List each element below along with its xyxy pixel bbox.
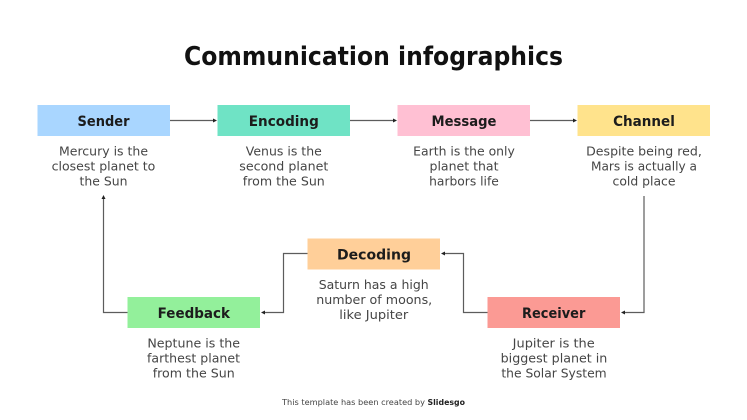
channel box: [578, 105, 710, 136]
decoding description: like Jupiter: [339, 308, 409, 323]
sender description: the Sun: [80, 175, 128, 190]
sender description: closest planet to: [52, 160, 156, 175]
channel description: Mars is actually a: [591, 160, 697, 175]
encoding heading: Encoding: [249, 114, 319, 130]
arrow: decoding to feedback: [261, 254, 308, 314]
message description: planet that: [430, 160, 498, 175]
arrow: channel to receiver: [621, 196, 644, 314]
panel: channel: [578, 105, 710, 190]
arrow: feedback to sender: [102, 195, 128, 312]
receiver box: [488, 297, 620, 328]
sender description: Mercury is the: [59, 145, 148, 160]
message description: harbors life: [429, 175, 499, 190]
receiver description: the Solar System: [501, 366, 607, 381]
receiver heading: Receiver: [522, 306, 586, 322]
decoding heading: Decoding: [337, 248, 411, 264]
message heading: Message: [432, 114, 497, 130]
title: Communication infographics: [184, 42, 563, 72]
receiver description: Jupiter is the: [512, 336, 595, 351]
feedback description: farthest planet: [147, 351, 240, 366]
decoding box: [308, 238, 440, 270]
panel: encoding: [218, 105, 350, 190]
arrow: encoding to message: [350, 118, 397, 122]
channel description: [586, 145, 702, 190]
encoding description: second planet: [239, 160, 328, 175]
message description: [413, 145, 515, 190]
feedback description: [147, 336, 240, 381]
message description: Earth is the only: [413, 145, 515, 160]
decoding description: [316, 278, 432, 323]
channel heading: Channel: [613, 114, 675, 130]
feedback description: Neptune is the: [147, 336, 240, 351]
encoding box: [218, 105, 350, 136]
sender description: [52, 145, 156, 190]
feedback box: [128, 297, 260, 328]
message box: [398, 105, 530, 136]
arrow: message to channel: [530, 118, 577, 122]
decoding description: Saturn has a high: [319, 278, 429, 293]
sender box: [38, 105, 170, 136]
arrow: sender to encoding: [170, 118, 217, 122]
sender heading: Sender: [78, 114, 130, 130]
footer credit: This template has been created by: [281, 398, 425, 407]
panel: message: [398, 105, 530, 190]
decoding description: number of moons,: [316, 293, 432, 308]
panel: decoding: [308, 238, 440, 323]
channel description: Despite being red,: [586, 145, 702, 160]
feedback description: from the Sun: [153, 366, 235, 381]
encoding description: from the Sun: [243, 175, 325, 190]
receiver description: biggest planet in: [501, 351, 607, 366]
encoding description: Venus is the: [246, 145, 322, 160]
panel: receiver: [488, 297, 620, 381]
panel: sender: [38, 105, 170, 190]
arrow: receiver to decoding: [441, 252, 488, 312]
footer credit: Slidesgo: [428, 398, 466, 407]
panel: feedback: [128, 297, 260, 381]
channel description: cold place: [612, 175, 676, 190]
receiver description: [501, 336, 607, 381]
encoding description: [239, 145, 328, 190]
feedback heading: Feedback: [158, 306, 230, 322]
